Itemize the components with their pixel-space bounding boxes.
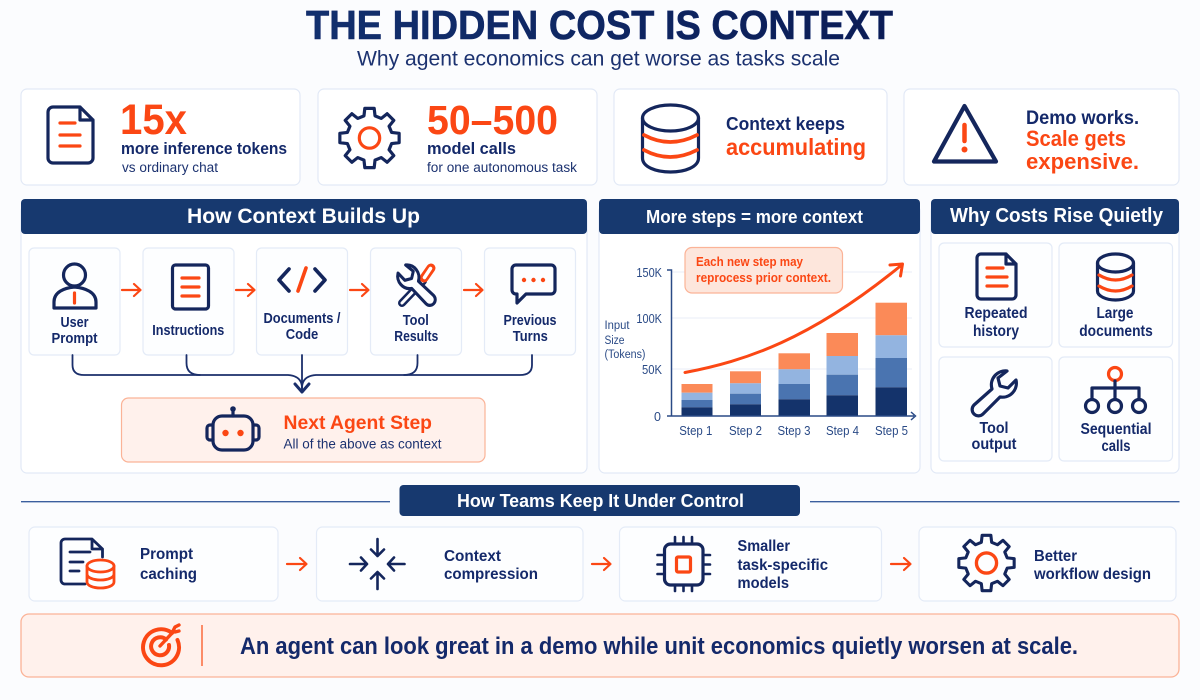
title: THE HIDDEN COST IS CONTEXT — [306, 2, 893, 48]
bar chart — [604, 248, 916, 438]
y axis labels: 150K — [636, 266, 663, 280]
growth trend arrow — [685, 264, 902, 372]
reason: repeated history: history — [973, 323, 1019, 340]
next agent step box: All of the above as context — [284, 436, 442, 452]
icon: document with database — [61, 539, 114, 588]
y axis title: (Tokens) — [604, 349, 646, 361]
card text: Demo works. — [1026, 108, 1139, 129]
step: previous turns: Turns — [513, 329, 548, 345]
stat card: demo works — [904, 89, 1179, 185]
panel: more steps chart — [599, 199, 920, 473]
section heading: how teams keep it under control: How Teams Keep It Under Control — [457, 490, 744, 511]
panel header: More steps = more context — [646, 207, 863, 227]
connector arrows into next step — [72, 355, 532, 392]
arrow — [464, 284, 482, 296]
icon: database — [642, 105, 698, 172]
callout: reprocess prior context. — [696, 271, 831, 285]
x axis labels — [679, 424, 908, 438]
callout — [685, 248, 842, 293]
step: documents and code — [256, 248, 348, 355]
control: context compression — [316, 527, 583, 601]
arrow — [236, 284, 254, 296]
reason: tool output: Tool — [980, 420, 1008, 437]
step: documents and code: Code — [286, 327, 318, 343]
card emphasis: accumulating — [726, 134, 866, 160]
reason: large documents: documents — [1079, 323, 1153, 340]
step: previous turns: Previous — [504, 313, 556, 329]
x axis labels: Step 5 — [875, 424, 908, 438]
card text: Context keeps — [726, 114, 845, 134]
control: smaller models — [620, 527, 882, 601]
icon: gear — [959, 535, 1014, 591]
stat note: vs ordinary chat — [122, 160, 218, 175]
panel header — [931, 199, 1179, 234]
step: tool results: Results — [394, 329, 438, 345]
reason: large documents — [1059, 243, 1172, 347]
arrow — [122, 284, 140, 296]
x axis labels: Step 3 — [778, 424, 811, 438]
reason: sequential calls: Sequential — [1080, 421, 1152, 438]
reason: sequential calls: calls — [1102, 438, 1130, 455]
y axis labels: 50K — [642, 363, 663, 377]
step: previous turns — [484, 248, 576, 355]
arrow — [891, 558, 910, 570]
x axis labels: Step 2 — [729, 424, 762, 438]
stat value: 15x — [120, 96, 187, 144]
next agent step box: Next Agent Step — [284, 413, 432, 434]
control: better workflow design: workflow design — [1033, 566, 1151, 583]
icon: target — [143, 625, 179, 665]
y axis labels — [636, 266, 663, 424]
panel header — [599, 199, 920, 234]
subtitle: Why agent economics can get worse as tasks scale — [357, 48, 840, 70]
takeaway banner — [21, 614, 1179, 677]
axes — [667, 270, 916, 420]
stat note: for one autonomous task — [427, 160, 577, 175]
arrow — [592, 558, 610, 570]
callout: Each new step may — [696, 255, 803, 269]
step: tool results: Tool — [403, 313, 429, 329]
step: instructions: Instructions — [152, 323, 224, 339]
icon: compress arrows — [350, 539, 404, 589]
icon: chip — [658, 537, 710, 591]
control: prompt caching — [29, 527, 278, 601]
stacked bar: step 5 — [876, 303, 907, 416]
step: tool results — [370, 248, 462, 355]
reason: sequential calls — [1059, 357, 1172, 461]
control: context compression: Context — [444, 548, 502, 565]
stacked bar: step 1 — [682, 384, 712, 416]
y axis title — [604, 320, 646, 361]
reason: tool output: output — [972, 436, 1016, 453]
panel header: How Context Builds Up — [187, 205, 420, 228]
stat card: context accumulating — [614, 89, 887, 185]
stat label: model calls — [427, 140, 516, 158]
icon: gear — [340, 108, 399, 168]
control: context compression: compression — [444, 566, 538, 583]
stat card: 50-500 model calls — [318, 89, 597, 185]
icon: warning triangle — [934, 106, 996, 162]
card emphasis: Scale gets — [1026, 126, 1126, 151]
reason: repeated history — [939, 243, 1052, 347]
panel header: Why Costs Rise Quietly — [950, 205, 1164, 227]
control: better workflow design — [919, 527, 1176, 601]
step: user prompt — [29, 248, 120, 355]
reason: large documents: Large — [1096, 305, 1134, 322]
x axis labels: Step 1 — [679, 424, 712, 438]
next agent step box — [122, 398, 485, 462]
stat card: 15x tokens — [21, 89, 300, 185]
control: smaller models: Smaller — [738, 538, 790, 555]
stat value: 50–500 — [427, 97, 558, 143]
y axis labels: 0 — [654, 410, 661, 424]
card emphasis: expensive. — [1026, 149, 1139, 174]
x axis labels: Step 4 — [826, 424, 859, 438]
step: documents and code: Documents / — [264, 311, 340, 327]
control: better workflow design: Better — [1034, 548, 1077, 565]
control: smaller models: task-specific — [738, 557, 828, 574]
stat label: more inference tokens — [121, 140, 287, 158]
section heading: how teams keep it under control — [21, 485, 1180, 516]
y axis title: Input — [604, 320, 630, 332]
reason: tool output — [939, 357, 1052, 461]
stacked bar: step 3 — [778, 353, 810, 416]
step: user prompt: User — [60, 315, 89, 331]
y axis labels: 100K — [636, 312, 663, 326]
control: prompt caching: Prompt — [140, 546, 194, 563]
stacked bar: step 2 — [730, 371, 761, 416]
arrow — [287, 558, 306, 570]
divider — [201, 625, 203, 666]
step: instructions — [143, 248, 234, 355]
banner text: An agent can look great in a demo while unit economics quietly worsen at scale. — [240, 633, 1078, 660]
arrow — [350, 284, 368, 296]
icon: document — [48, 107, 93, 163]
icon: robot — [207, 406, 259, 450]
panel: why costs rise quietly — [931, 199, 1179, 473]
panel header — [21, 199, 587, 234]
control: prompt caching: caching — [140, 566, 197, 583]
step: user prompt: Prompt — [52, 331, 98, 347]
y axis title: Size — [604, 335, 624, 347]
control: smaller models: models — [738, 575, 789, 592]
panel: how context builds up — [21, 199, 587, 473]
reason: repeated history: Repeated — [964, 305, 1028, 322]
stacked bar: step 4 — [826, 333, 858, 416]
